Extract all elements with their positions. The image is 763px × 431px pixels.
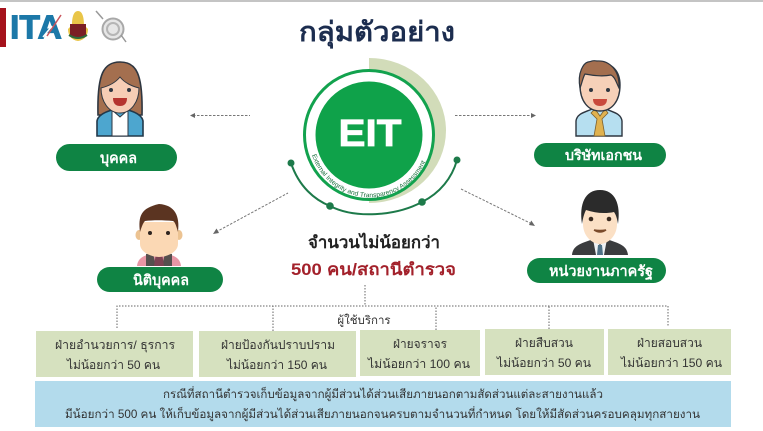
EIT emblem (288, 58, 460, 216)
arrow: to juristic person (213, 193, 288, 234)
icon: businessman avatar (576, 61, 622, 136)
box: investigation: ฝ่ายสืบสวน (515, 336, 573, 350)
label: individual: บุคคล (100, 151, 137, 167)
heading: 500 per station: 500 คน/สถานีตำรวจ (291, 260, 456, 279)
note panel: กรณีที่สถานีตำรวจเก็บข้อมูลจากผู้มีส่วนได้ส่วนเสียภายนอกตามสัดส่วนแต่ละสายงานแล้ว (163, 386, 603, 402)
arrow: to individual (190, 113, 250, 118)
box: administration (36, 331, 193, 377)
note panel: มีน้อยกว่า 500 คน ให้เก็บข้อมูลจากผู้มีส่วนได้ส่วนเสียภายนอกจนครบตามจำนวนที่กำหนด โดยให้มีสัดส่วนครอบคลุมทุกสายงาน (65, 406, 700, 422)
box: investigation: ไม่น้อยกว่า 50 คน (496, 356, 591, 370)
box: traffic (360, 330, 480, 376)
box: investigation (485, 329, 604, 375)
icon: woman avatar (97, 62, 143, 136)
EIT emblem: EIT (338, 113, 402, 155)
icon: legal entity avatar (136, 204, 182, 266)
EIT emblem: External Integrity and Transparency Assessment (312, 154, 426, 198)
box: crime prevention: ฝ่ายป้องกันปราบปราม (221, 338, 335, 352)
label: private company: บริษัทเอกชน (565, 147, 642, 163)
arrow: to government agency (461, 189, 535, 226)
note panel (35, 381, 731, 427)
label: juristic person: นิติบุคคล (133, 272, 189, 289)
box: traffic: ไม่น้อยกว่า 100 คน (367, 357, 470, 371)
box: inquiry: ไม่น้อยกว่า 150 คน (620, 356, 722, 370)
logo: police emblem (68, 11, 88, 41)
heading: minimum count: จำนวนไม่น้อยกว่า (308, 232, 440, 252)
box: traffic: ฝ่ายจราจร (393, 337, 448, 351)
icon: government officer avatar (572, 190, 628, 255)
logo: scales seal (96, 11, 126, 42)
box: crime prevention: ไม่น้อยกว่า 150 คน (226, 358, 327, 372)
label: service users: ผู้ใช้บริการ (337, 314, 391, 327)
label: government agency: หน่วยงานภาครัฐ (549, 264, 653, 281)
box: administration: ไม่น้อยกว่า 50 คน (66, 358, 160, 372)
box: inquiry: ฝ่ายสอบสวน (637, 336, 702, 350)
box: crime prevention (199, 331, 356, 377)
connector: dotted tree (117, 285, 668, 331)
label: government agency (527, 258, 666, 283)
box: inquiry (608, 329, 731, 375)
label: individual (56, 144, 177, 171)
label: private company (534, 143, 666, 167)
arrow: to private company (455, 113, 536, 118)
label: juristic person (97, 267, 223, 292)
logo: ITA: ITA (10, 8, 62, 46)
title: กลุ่มตัวอย่าง (299, 17, 455, 49)
box: administration: ฝ่ายอำนวยการ/ ธุรการ (55, 338, 176, 353)
